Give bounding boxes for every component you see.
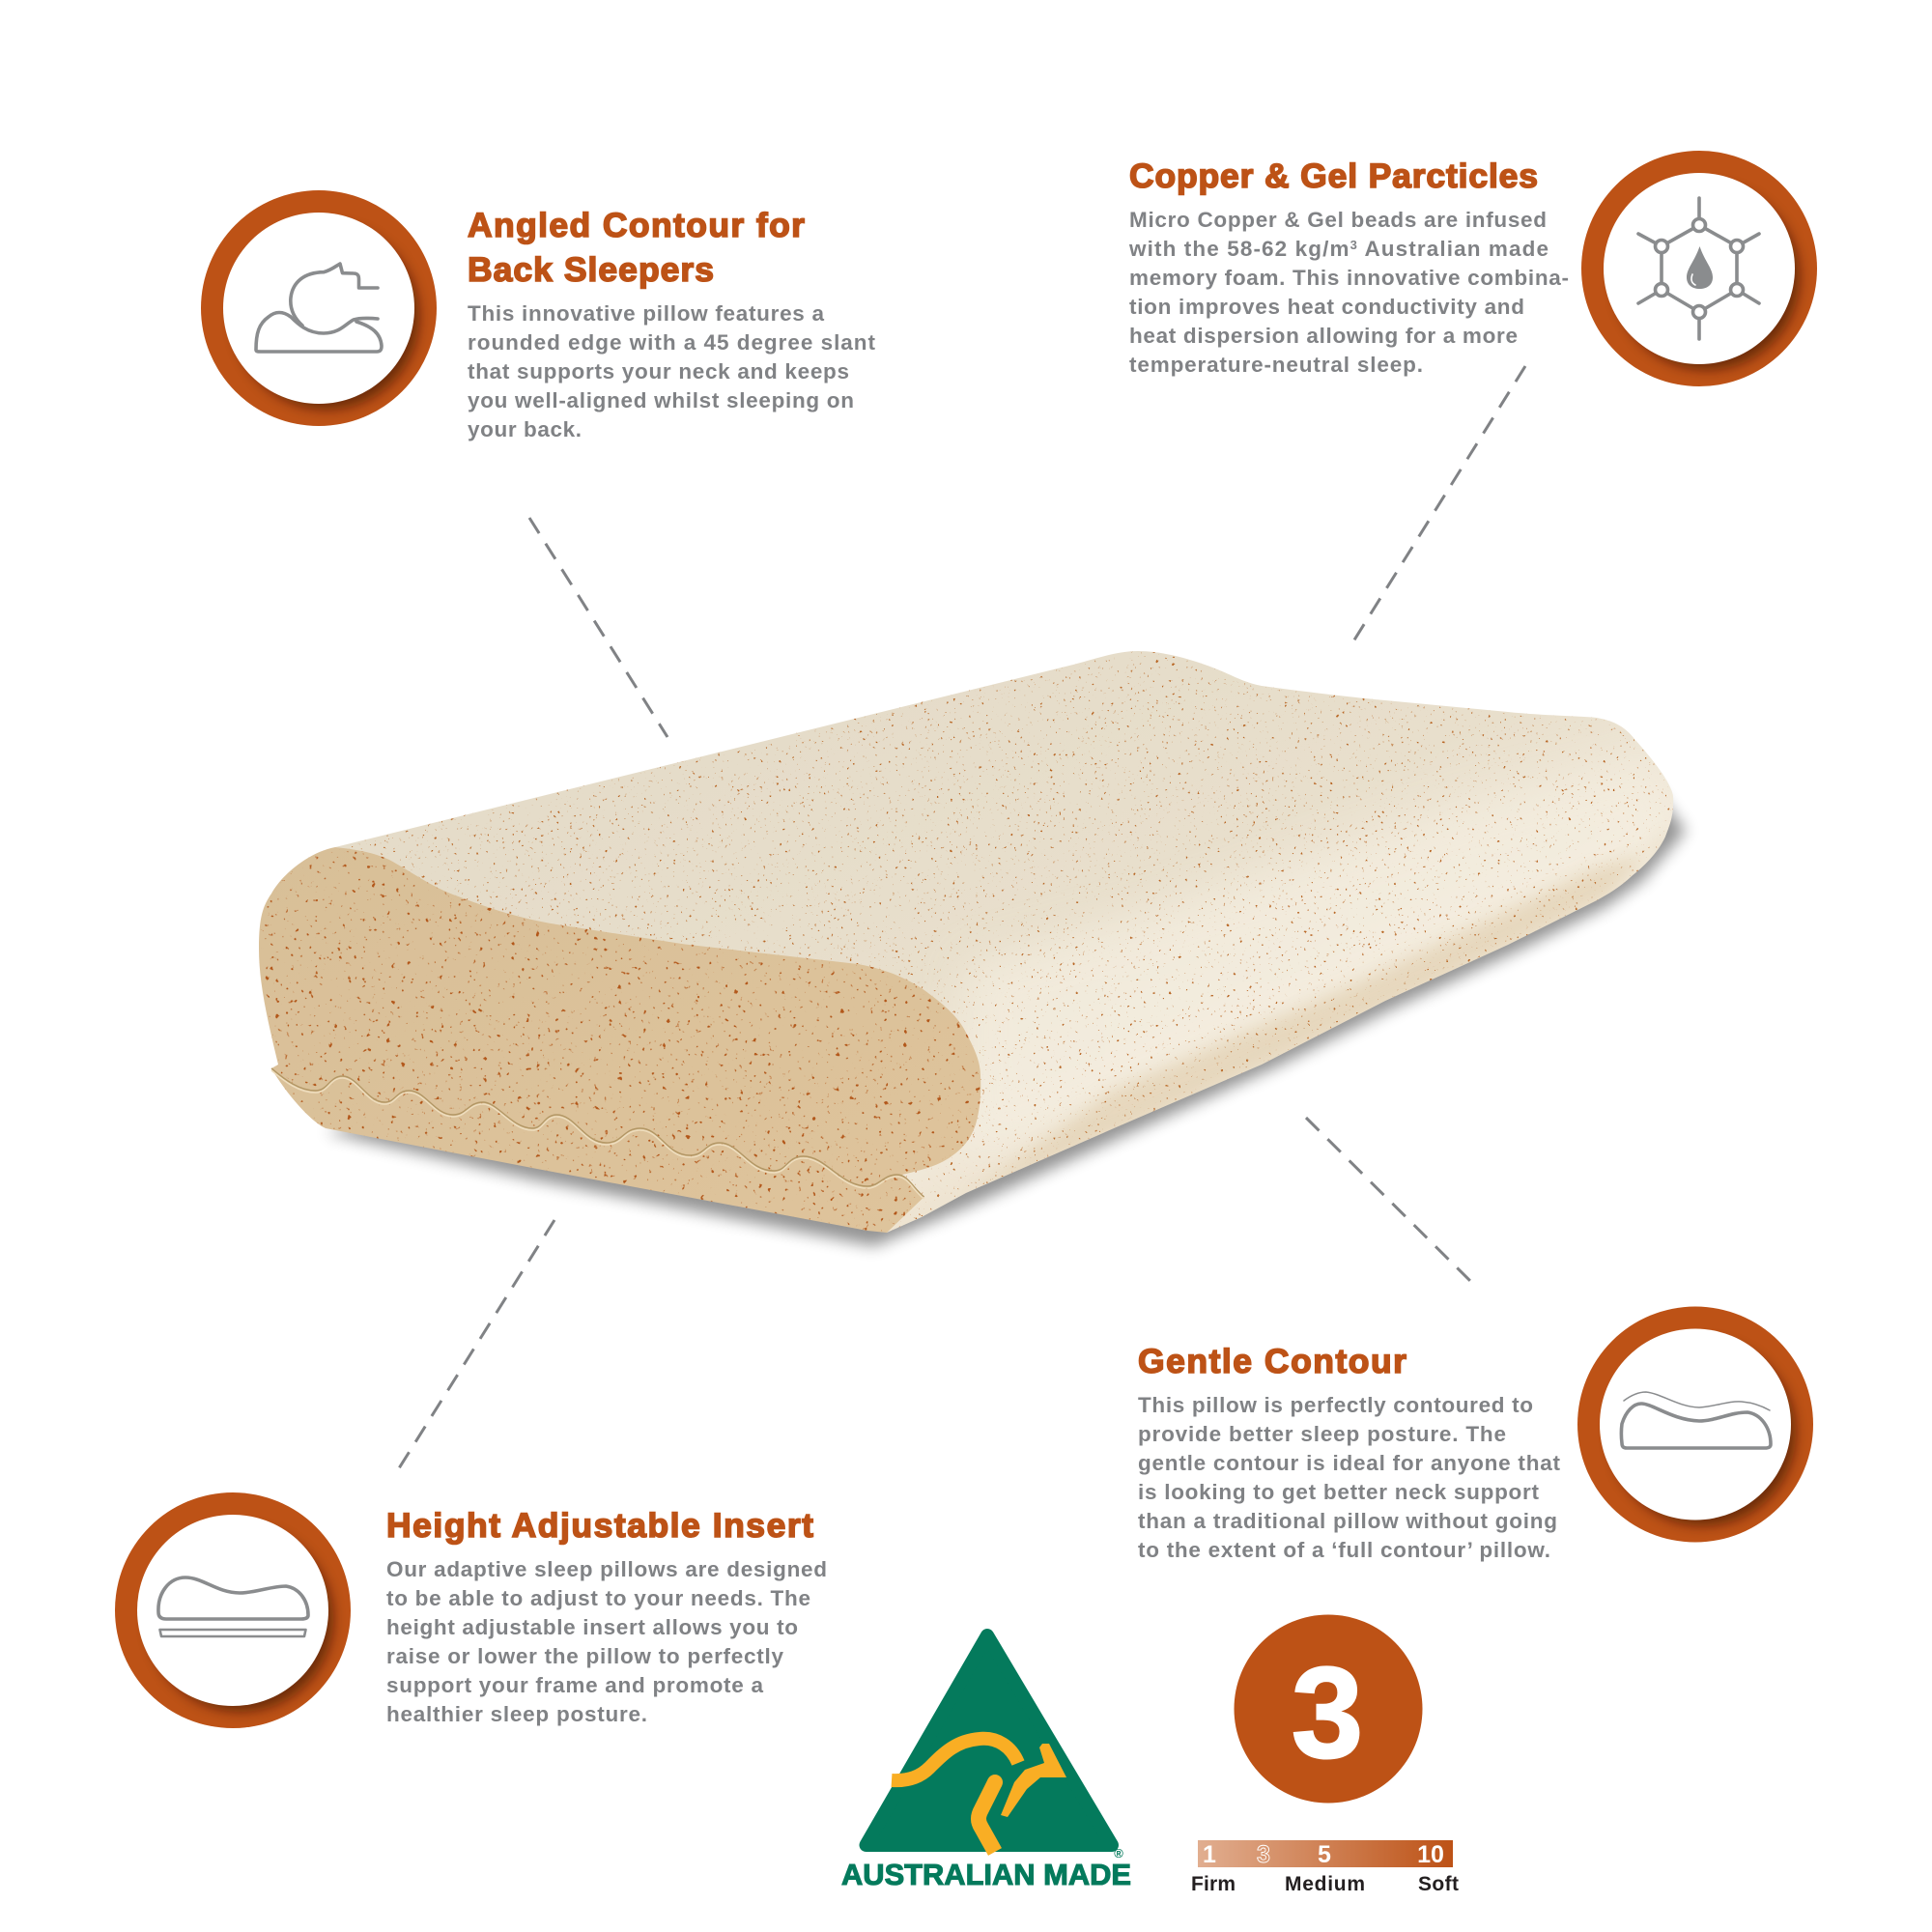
pillow top surface — [319, 651, 1673, 1233]
pillow front face with insert — [251, 840, 995, 1246]
front face speckles — [251, 840, 995, 1246]
text: copper and gel: temperature-neutral sleep. — [1129, 353, 1423, 377]
text: height adjustable: support your frame and promote a — [386, 1673, 763, 1697]
dashed leader: angled contour — [529, 518, 668, 737]
text: height adjustable: Our adaptive sleep pillows are designed — [386, 1557, 827, 1581]
text: angled contour: This innovative pillow features a — [468, 301, 824, 326]
scale numbers: 10 — [1417, 1841, 1444, 1868]
scale bar — [1198, 1840, 1453, 1867]
icon badge: back sleeper — [201, 190, 437, 426]
heading: copper and gel: Copper & Gel Parcticles — [1129, 156, 1538, 195]
pillow photo — [251, 647, 1686, 1246]
firmness number badge: 3 — [1292, 1641, 1363, 1785]
insert wave seam — [271, 1068, 924, 1197]
scale labels: Soft — [1418, 1873, 1459, 1895]
heading: gentle contour: Gentle Contour — [1138, 1342, 1406, 1380]
firmness number badge — [1235, 1615, 1422, 1803]
icon: pillow with insert — [158, 1577, 308, 1636]
icon: head on pillow — [256, 264, 382, 352]
text: angled contour: your back. — [468, 417, 582, 441]
heading: height adjustable: Height Adjustable Insert — [386, 1506, 813, 1545]
scale numbers — [1203, 1841, 1444, 1868]
text: angled contour: rounded edge with a 45 degree slant — [468, 330, 875, 355]
icon badge: height adjustable — [115, 1492, 351, 1728]
heading: angled contour: Back Sleepers — [468, 250, 714, 289]
text: copper and gel: heat dispersion allowing for a more — [1129, 324, 1518, 348]
scale numbers: 3 — [1257, 1841, 1270, 1868]
green triangle — [866, 1635, 1112, 1845]
firmness scale — [1191, 1840, 1459, 1895]
icon: molecule with drop — [1638, 198, 1759, 339]
text: gentle contour — [1138, 1393, 1561, 1562]
scale numbers: 1 — [1203, 1841, 1216, 1868]
text: copper and gel: tion improves heat conductivity and — [1129, 295, 1524, 319]
top surface speckles — [328, 647, 1681, 1236]
dashed leader: gentle contour — [1306, 1118, 1476, 1287]
text: height adjustable: raise or lower the pillow to perfectly — [386, 1644, 783, 1668]
scale numbers: 5 — [1318, 1841, 1331, 1868]
heading: angled contour — [468, 206, 805, 289]
text: height adjustable: height adjustable insert allows you to — [386, 1615, 798, 1639]
text: copper and gel — [1128, 208, 1569, 377]
dashed leader: copper and gel — [1349, 366, 1525, 649]
pillow surface shading — [328, 647, 1681, 1236]
scale labels — [1191, 1873, 1459, 1895]
pillow shadow — [326, 773, 1686, 1246]
icon badge: gentle contour — [1577, 1306, 1813, 1542]
text: copper and gel: Australian made — [1358, 237, 1548, 261]
scale labels: Firm — [1191, 1873, 1236, 1895]
text: copper and gel: memory foam. This innovative combina- — [1129, 266, 1569, 290]
Australian Made logo — [841, 1635, 1131, 1891]
heading: angled contour: Angled Contour for — [468, 206, 805, 244]
text: angled contour: that supports your neck and keeps — [468, 359, 849, 384]
icon badge: copper and gel — [1581, 151, 1817, 386]
text: height adjustable: healthier sleep posture. — [386, 1702, 647, 1726]
text: angled contour — [468, 301, 875, 441]
text: copper and gel: Micro Copper & Gel beads are infused — [1129, 208, 1547, 232]
text: gentle contour: This pillow is perfectly contoured to — [1138, 1393, 1533, 1417]
text: gentle contour: gentle contour is ideal for anyone that — [1138, 1451, 1561, 1475]
icon: gentle contour pillow — [1621, 1392, 1771, 1448]
text: gentle contour: to the extent of a ‘full contour’ pillow. — [1138, 1538, 1550, 1562]
dashed leader: height insert — [394, 1220, 554, 1476]
text: copper and gel: 3 — [1350, 238, 1357, 252]
text: gentle contour: is looking to get better neck support — [1138, 1480, 1540, 1504]
text: height adjustable: to be able to adjust to your needs. The — [386, 1586, 810, 1610]
logo wordmark: AUSTRALIAN MADE — [841, 1858, 1131, 1891]
text: copper and gel: with the 58-62 kg/m — [1129, 237, 1349, 261]
text: gentle contour: than a traditional pillow without going — [1138, 1509, 1557, 1533]
kangaroo — [892, 1739, 1066, 1852]
scale labels: Medium — [1285, 1873, 1365, 1895]
text: gentle contour: provide better sleep posture. The — [1138, 1422, 1506, 1446]
registered mark: ® — [1114, 1846, 1123, 1861]
text: angled contour: you well-aligned whilst sleeping on — [468, 388, 854, 412]
text: height adjustable — [386, 1557, 827, 1726]
